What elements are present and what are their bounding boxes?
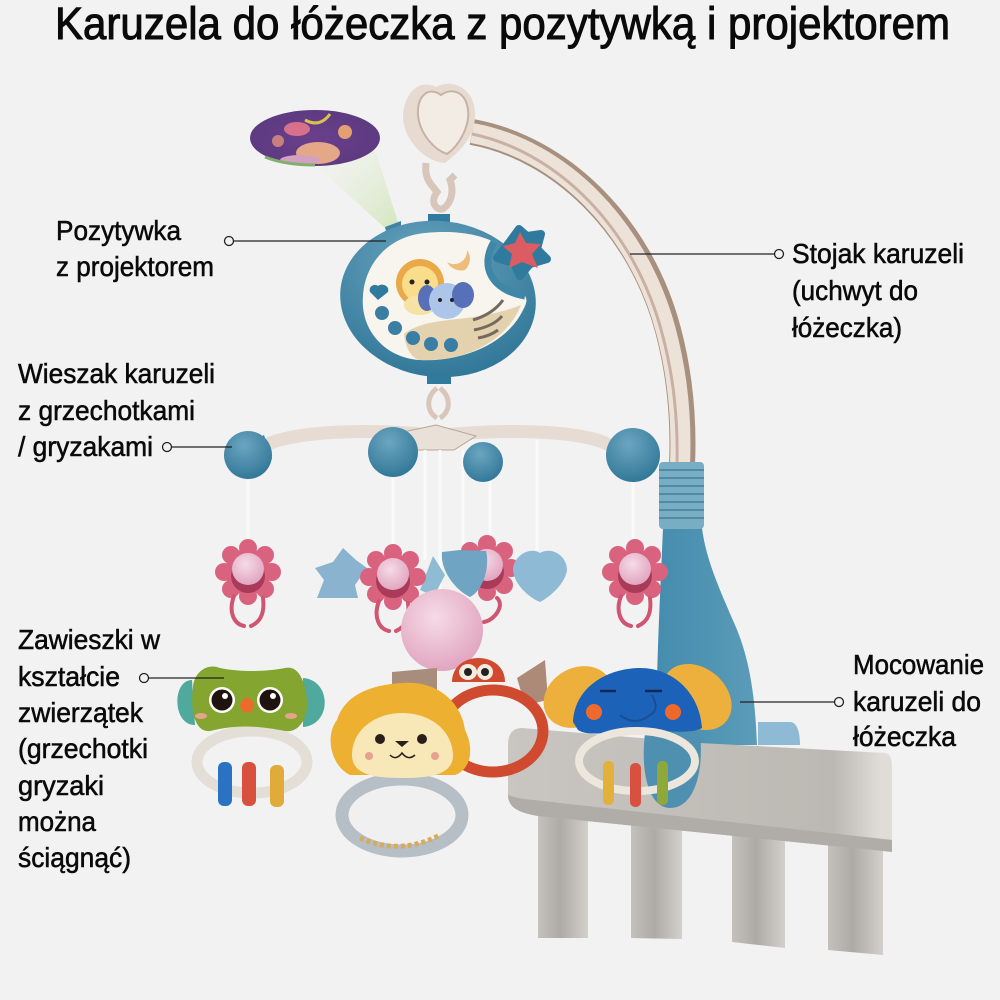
label: Stojak karuzeli: łóżeczka) [792,312,902,343]
illustration: heart hanger [403,84,475,209]
label: Zawieszki: Zawieszki w [18,624,160,655]
label: Wieszak karuzeli: / gryzakami [18,431,153,462]
label: Mocowanie: Mocowanie [853,649,984,680]
label: Mocowanie: karuzeli do [853,686,981,717]
label: Stojak karuzeli [630,238,964,343]
label: Mocowanie: łóżeczka [853,721,957,752]
illustration: crib legs [538,810,883,955]
label: Zawieszki: ściągnąć) [18,842,131,873]
illustration: stand arm [472,132,682,465]
illustration: music box projector [332,211,547,418]
label: Stojak karuzeli: Stojak karuzeli [792,238,964,269]
label: Mocowanie [740,649,984,752]
label: Zawieszki: można [18,806,97,837]
label: Wieszak karuzeli [18,358,232,462]
label: Pozytywka z projektorem [56,215,386,282]
label: Zawieszki: zwierzątek [18,697,143,728]
label: Pozytywka z projektorem: Pozytywka [56,215,182,246]
label: Stojak karuzeli: (uchwyt do [792,275,918,306]
label: Zawieszki: (grzechotki [18,733,148,764]
illustration: stand base [657,462,800,745]
illustration: lion rattle [331,683,470,851]
label: Zawieszki: gryzaki [18,770,104,801]
label: Wieszak karuzeli: Wieszak karuzeli [18,358,215,389]
illustration: elephant rattle [532,650,745,807]
label: Pozytywka z projektorem: z projektorem [56,251,214,282]
illustration: hanger bar [224,425,660,590]
illustration: owl rattle [177,666,325,807]
illustration: crab rattle [443,658,543,772]
label: Zawieszki: kształcie [18,661,120,692]
illustration: stand clamp behind ring [644,733,701,808]
illustration: flowers and stars [215,535,668,671]
illustration: brown toy [392,660,548,705]
label: Zawieszki [18,624,224,873]
label: Wieszak karuzeli: z grzechotkami [18,395,195,426]
illustration: crib rail [508,728,892,852]
illustration: projection [250,110,398,228]
